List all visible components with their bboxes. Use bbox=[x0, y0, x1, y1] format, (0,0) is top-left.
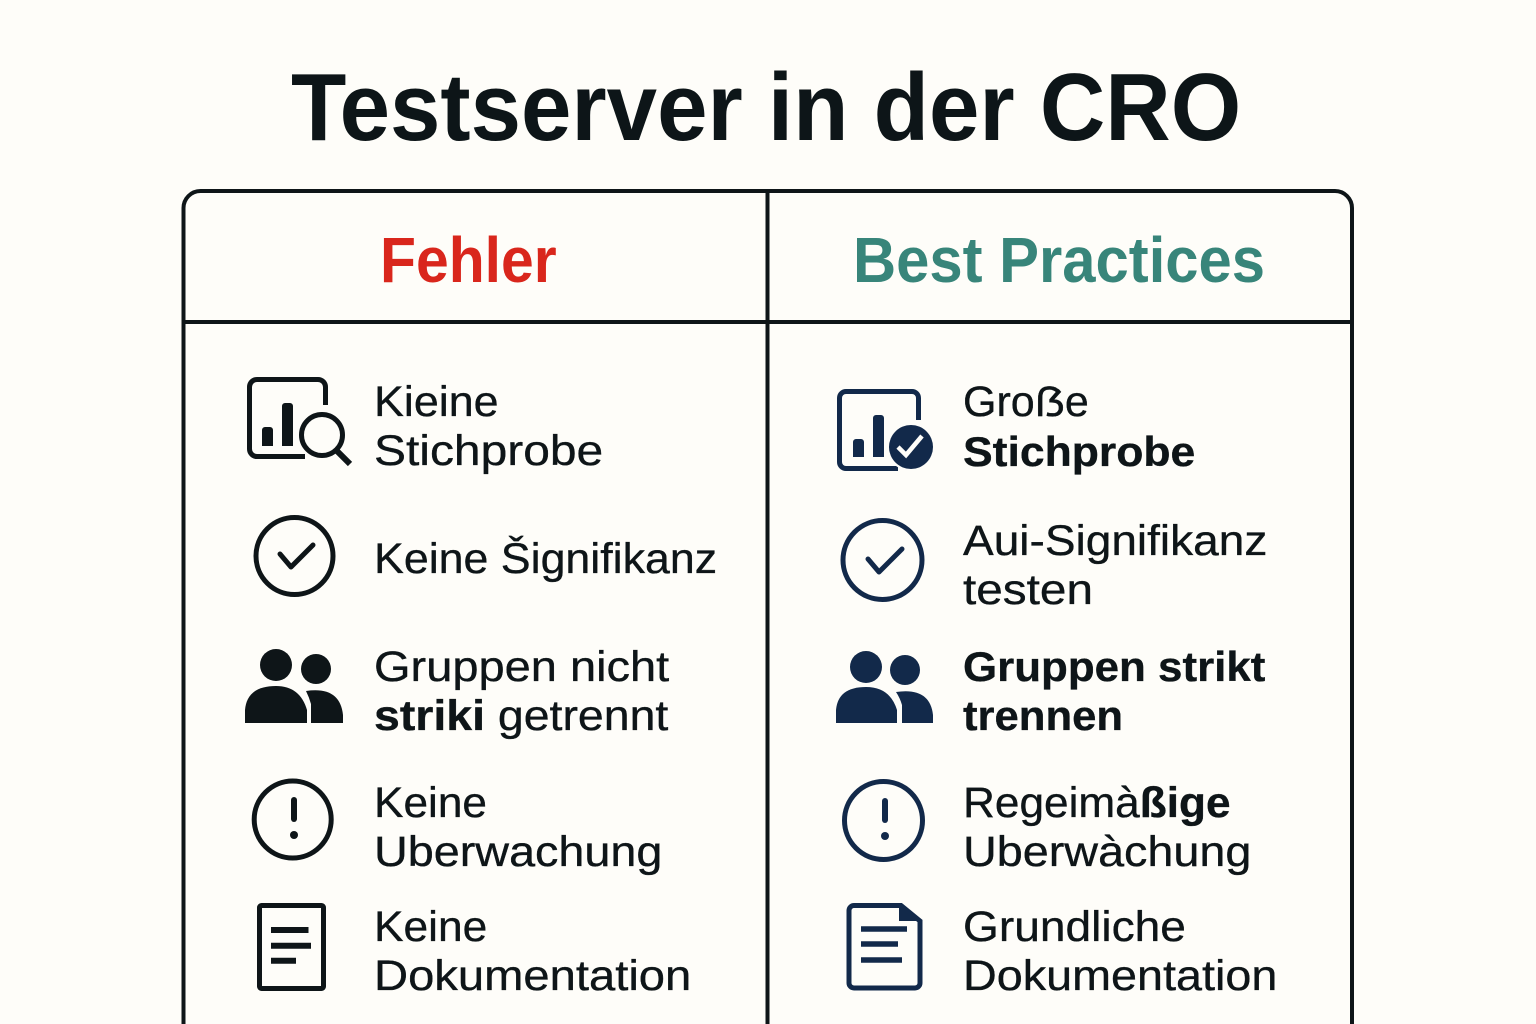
text: Keine Uberwachung: Keine bbox=[374, 779, 487, 827]
text: Auf Signifikanz testen bbox=[962, 517, 1267, 614]
text: Regelmaessige Uberwachung bbox=[963, 779, 1251, 876]
panel: Fehler bbox=[245, 377, 717, 1000]
text: Auf Signifikanz testen: Aui-Signifikanz bbox=[963, 517, 1267, 565]
text: Keine Uberwachung bbox=[374, 779, 662, 876]
icon: check circle bbox=[840, 518, 924, 602]
text: Grundliche Dokumentation: Grundliche bbox=[963, 903, 1186, 951]
text: Gruppen strikt trennen: Gruppen strikt bbox=[963, 643, 1265, 690]
title: Testserver in der CRO bbox=[291, 54, 1241, 161]
text: Auf Signifikanz testen: testen bbox=[963, 566, 1093, 614]
heading: Fehler: Fehler bbox=[380, 224, 557, 296]
text: Regelmaessige Uberwachung: Uberwàchung bbox=[963, 828, 1251, 876]
icon: chart with magnifier bbox=[247, 377, 352, 466]
text: Grosse Stichprobe bbox=[963, 378, 1195, 475]
text: Gruppen nicht strikt getrennt: striki getrennt bbox=[374, 692, 668, 740]
icon: chart with check badge bbox=[837, 389, 933, 471]
text: Grundliche Dokumentation: Dokumentation bbox=[963, 952, 1277, 1000]
panel: Best Practices bbox=[836, 378, 1277, 1000]
icon: document bbox=[846, 903, 922, 990]
icon: exclamation circle bbox=[252, 778, 334, 860]
icon: check circle bbox=[254, 515, 336, 597]
text: Grosse Stichprobe: Stichprobe bbox=[963, 428, 1195, 475]
text: Gruppen nicht strikt getrennt: Gruppen nicht bbox=[374, 643, 669, 691]
text: Keine Dokumentation bbox=[374, 903, 691, 1000]
heading: Best Practices: Best Practices bbox=[853, 224, 1265, 296]
text: Gruppen strikt trennen bbox=[963, 643, 1265, 739]
text: Kleine Stichprobe: Kieine bbox=[374, 378, 499, 426]
text: Keine Dokumentation: Dokumentation bbox=[374, 952, 691, 1000]
text: Kleine Stichprobe: Stichprobe bbox=[374, 427, 603, 475]
text: Grosse Stichprobe: Groẞe bbox=[963, 378, 1089, 426]
text: Keine Uberwachung: Uberwachung bbox=[374, 828, 662, 876]
text: Kleine Stichprobe bbox=[374, 378, 603, 475]
text: Grundliche Dokumentation bbox=[963, 903, 1277, 1000]
icon: document bbox=[257, 903, 326, 991]
icon: people bbox=[245, 649, 343, 723]
text: Keine Signifikanz: Keine Šignifikanz bbox=[374, 535, 717, 583]
icon: people bbox=[836, 651, 933, 723]
text: Keine Dokumentation: Keine bbox=[374, 903, 487, 951]
text: Gruppen nicht strikt getrennt bbox=[374, 643, 670, 740]
text: Regelmaessige Uberwachung: Regeimàßige bbox=[963, 779, 1231, 827]
icon: exclamation circle bbox=[842, 779, 925, 862]
text: Gruppen strikt trennen: trennen bbox=[963, 692, 1123, 739]
